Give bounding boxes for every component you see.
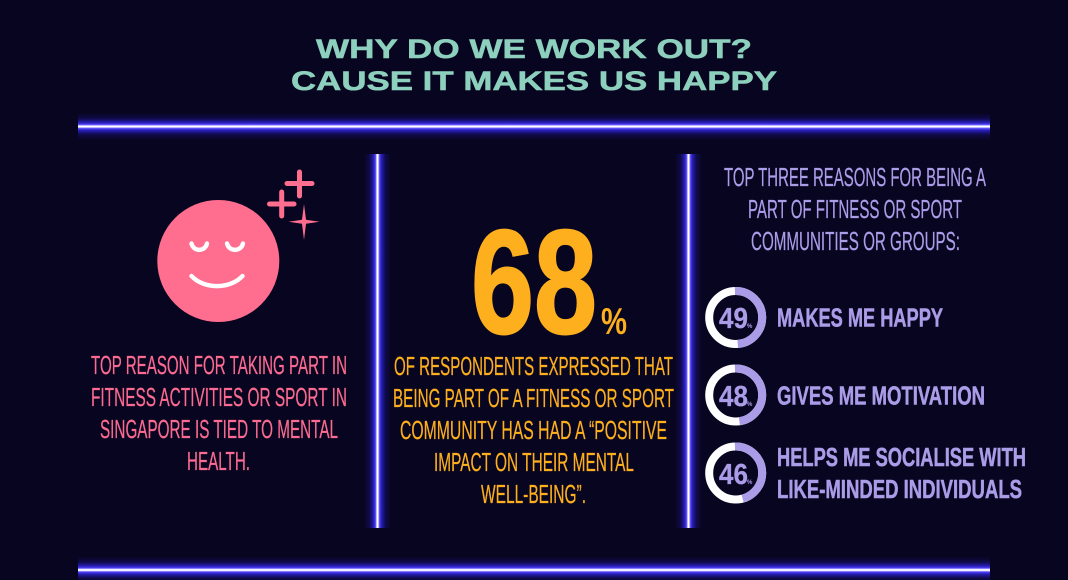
text: top reason xyxy=(91,350,347,476)
text: respondents xyxy=(393,351,674,509)
text: respondents: COMMUNITY HAS HAD A “POSITIVE xyxy=(400,415,667,445)
text: respondents: OF RESPONDENTS EXPRESSED THAT xyxy=(394,351,673,381)
donut: 46 percent: % xyxy=(747,480,753,486)
text: respondents: WELL-BEING”. xyxy=(481,479,586,509)
label: helps me socialise xyxy=(777,442,1026,504)
text: respondents: IMPACT ON THEIR MENTAL xyxy=(434,447,634,477)
percent sign: % xyxy=(601,301,627,342)
donut: 46 percent xyxy=(709,446,762,500)
text: top reason: HEALTH. xyxy=(187,446,250,476)
neon divider: bottom xyxy=(78,556,990,580)
neon divider: right column xyxy=(675,154,702,528)
donut: 49 percent: % xyxy=(747,324,753,330)
heading xyxy=(724,162,986,256)
text: respondents: BEING PART OF A FITNESS OR SPORT xyxy=(393,383,674,413)
title xyxy=(291,34,777,96)
big number: 68 xyxy=(471,200,597,365)
panel: 68 percent statistic xyxy=(393,200,674,509)
title: WHY DO WE WORK OUT? xyxy=(316,34,752,64)
donut: 49 percent xyxy=(709,291,762,344)
text: top reason: SINGAPORE IS TIED TO MENTAL xyxy=(100,414,338,444)
panel: mental health reason xyxy=(91,172,347,476)
label: gives me motivation: GIVES ME MOTIVATION xyxy=(777,380,985,410)
donut: 48 percent: % xyxy=(747,402,753,408)
donut: 48 percent xyxy=(709,368,762,422)
donut: 48 percent: 48 xyxy=(719,381,748,413)
text: top reason: FITNESS ACTIVITIES OR SPORT IN xyxy=(91,382,347,412)
title: CAUSE IT MAKES US HAPPY xyxy=(291,66,777,96)
label: makes me happy: MAKES ME HAPPY xyxy=(777,302,943,332)
panel: top three reasons xyxy=(709,162,1026,504)
neon divider: left column xyxy=(364,154,391,528)
neon divider: top xyxy=(78,113,990,140)
text: top reason: TOP REASON FOR TAKING PART IN xyxy=(91,350,347,380)
icon: smiling face with sparkles xyxy=(157,172,320,322)
donut: 46 percent: 46 xyxy=(719,459,748,491)
donut: 49 percent: 49 xyxy=(719,303,748,335)
